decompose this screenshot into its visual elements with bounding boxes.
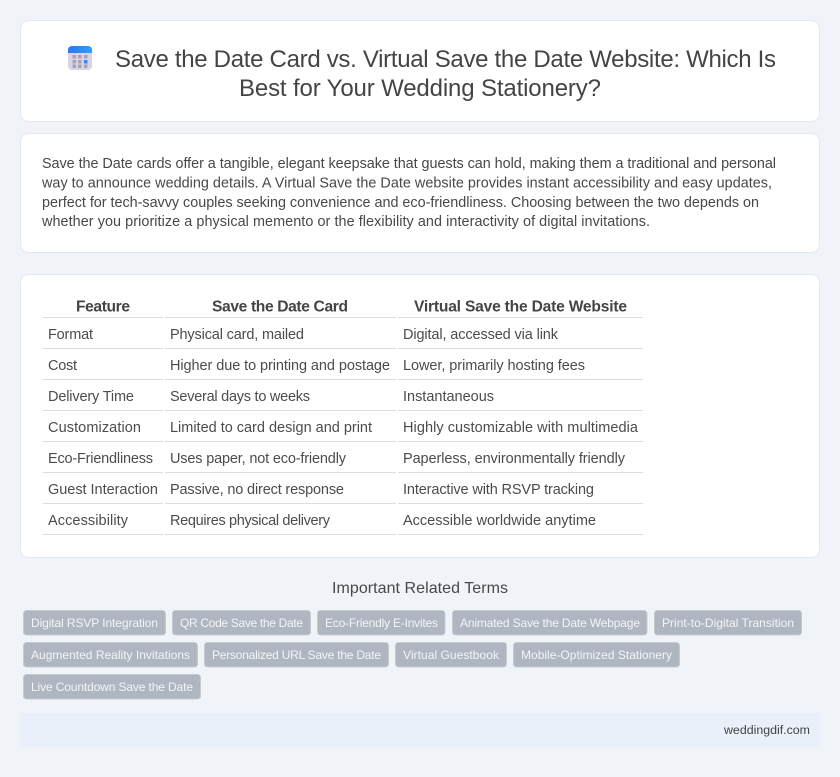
heading: important related terms: Important Related Terms — [332, 580, 508, 597]
row: accessibility: Requires physical delivery — [170, 513, 331, 529]
text block: introduction: perfect for tech-savvy couples seeking convenience and eco-friendliness. Choosing between the two depends on — [42, 195, 759, 211]
related term chips — [24, 610, 802, 699]
table header row: Feature — [76, 298, 130, 316]
row: accessibility — [48, 513, 596, 529]
table header row: Virtual Save the Date Website — [414, 298, 627, 316]
row: customization: Customization — [48, 420, 141, 436]
row: guest interaction: Passive, no direct response — [170, 482, 344, 498]
row: format: Format — [48, 327, 93, 343]
row: format — [48, 327, 559, 343]
chip: augmented reality invitations: Augmented Reality Invitations — [31, 648, 190, 662]
chip: personalized url save the date: Personalized URL Save the Date — [212, 648, 381, 662]
row: eco-friendliness: Eco-Friendliness — [48, 451, 153, 467]
chip: virtual guestbook: Virtual Guestbook — [403, 648, 500, 662]
panel: introduction — [20, 134, 820, 252]
row: guest interaction: Interactive with RSVP tracking — [403, 482, 594, 498]
row: delivery time: Several days to weeks — [170, 389, 310, 405]
chip: digital rsvp integration — [24, 610, 166, 635]
row: eco-friendliness — [48, 451, 626, 467]
footer — [20, 713, 820, 747]
text block: introduction: way to announce wedding details. A Virtual Save the Date website provides instant accessibility and easy updates, — [41, 176, 772, 192]
chip: live countdown save the date: Live Countdown Save the Date — [31, 680, 193, 694]
chip: qr code save the date: QR Code Save the Date — [180, 616, 303, 630]
chip: personalized url save the date — [204, 642, 388, 667]
chip: virtual guestbook — [396, 642, 506, 667]
title: Save the Date Card vs. Virtual Save the Date Website: Which Is — [115, 46, 776, 73]
chip: eco-friendly e-invites — [318, 610, 445, 635]
chip: qr code save the date — [172, 610, 310, 635]
table header row: Save the Date Card — [212, 298, 348, 316]
title — [115, 46, 776, 102]
chip: digital rsvp integration: Digital RSVP Integration — [31, 616, 158, 630]
row: accessibility: Accessible worldwide anytime — [403, 513, 596, 529]
row: eco-friendliness: Paperless, environmentally friendly — [403, 451, 626, 467]
row: eco-friendliness: Uses paper, not eco-friendly — [170, 451, 347, 467]
chip: print-to-digital transition — [654, 610, 802, 635]
text block: introduction — [41, 156, 776, 230]
row: customization — [48, 420, 639, 436]
chip: mobile-optimized stationery — [514, 642, 680, 667]
row: format: Physical card, mailed — [170, 327, 304, 343]
table header row — [76, 298, 627, 316]
row: format: Digital, accessed via link — [403, 327, 559, 343]
row: cost: Higher due to printing and postage — [170, 358, 390, 374]
title: Best for Your Wedding Stationery? — [239, 75, 601, 102]
row: delivery time — [48, 389, 494, 405]
chip: live countdown save the date — [24, 674, 200, 699]
panel: comparison table — [20, 274, 820, 558]
row: cost: Lower, primarily hosting fees — [403, 358, 585, 374]
row: cost: Cost — [48, 358, 77, 374]
chip: print-to-digital transition: Print-to-Digital Transition — [662, 616, 794, 630]
row: guest interaction: Guest Interaction — [48, 482, 158, 498]
row: delivery time: Instantaneous — [403, 389, 494, 405]
row: customization: Highly customizable with multimedia — [403, 420, 639, 436]
table grid lines — [43, 318, 643, 534]
row: delivery time: Delivery Time — [48, 389, 134, 405]
chip: animated save the date webpage: Animated Save the Date Webpage — [460, 616, 640, 630]
row: customization: Limited to card design and print — [170, 420, 372, 436]
chip: augmented reality invitations — [24, 642, 198, 667]
chip: animated save the date webpage — [452, 610, 647, 635]
text block: introduction: Save the Date cards offer a tangible, elegant keepsake that guests can hold, making them a traditional and personal — [42, 156, 776, 172]
row: accessibility: Accessibility — [48, 513, 129, 529]
icon: calendar — [68, 46, 92, 70]
chip: mobile-optimized stationery: Mobile-Optimized Stationery — [521, 648, 672, 662]
chip: eco-friendly e-invites: Eco-Friendly E-Invites — [325, 616, 438, 630]
row: guest interaction — [48, 482, 594, 498]
panel: header — [20, 20, 820, 122]
footer source text: weddingdif.com — [723, 723, 810, 737]
row: cost — [48, 358, 585, 374]
text block: introduction: whether you prioritize a physical memento or the flexibility and interactivity of digital invitations. — [41, 214, 650, 230]
